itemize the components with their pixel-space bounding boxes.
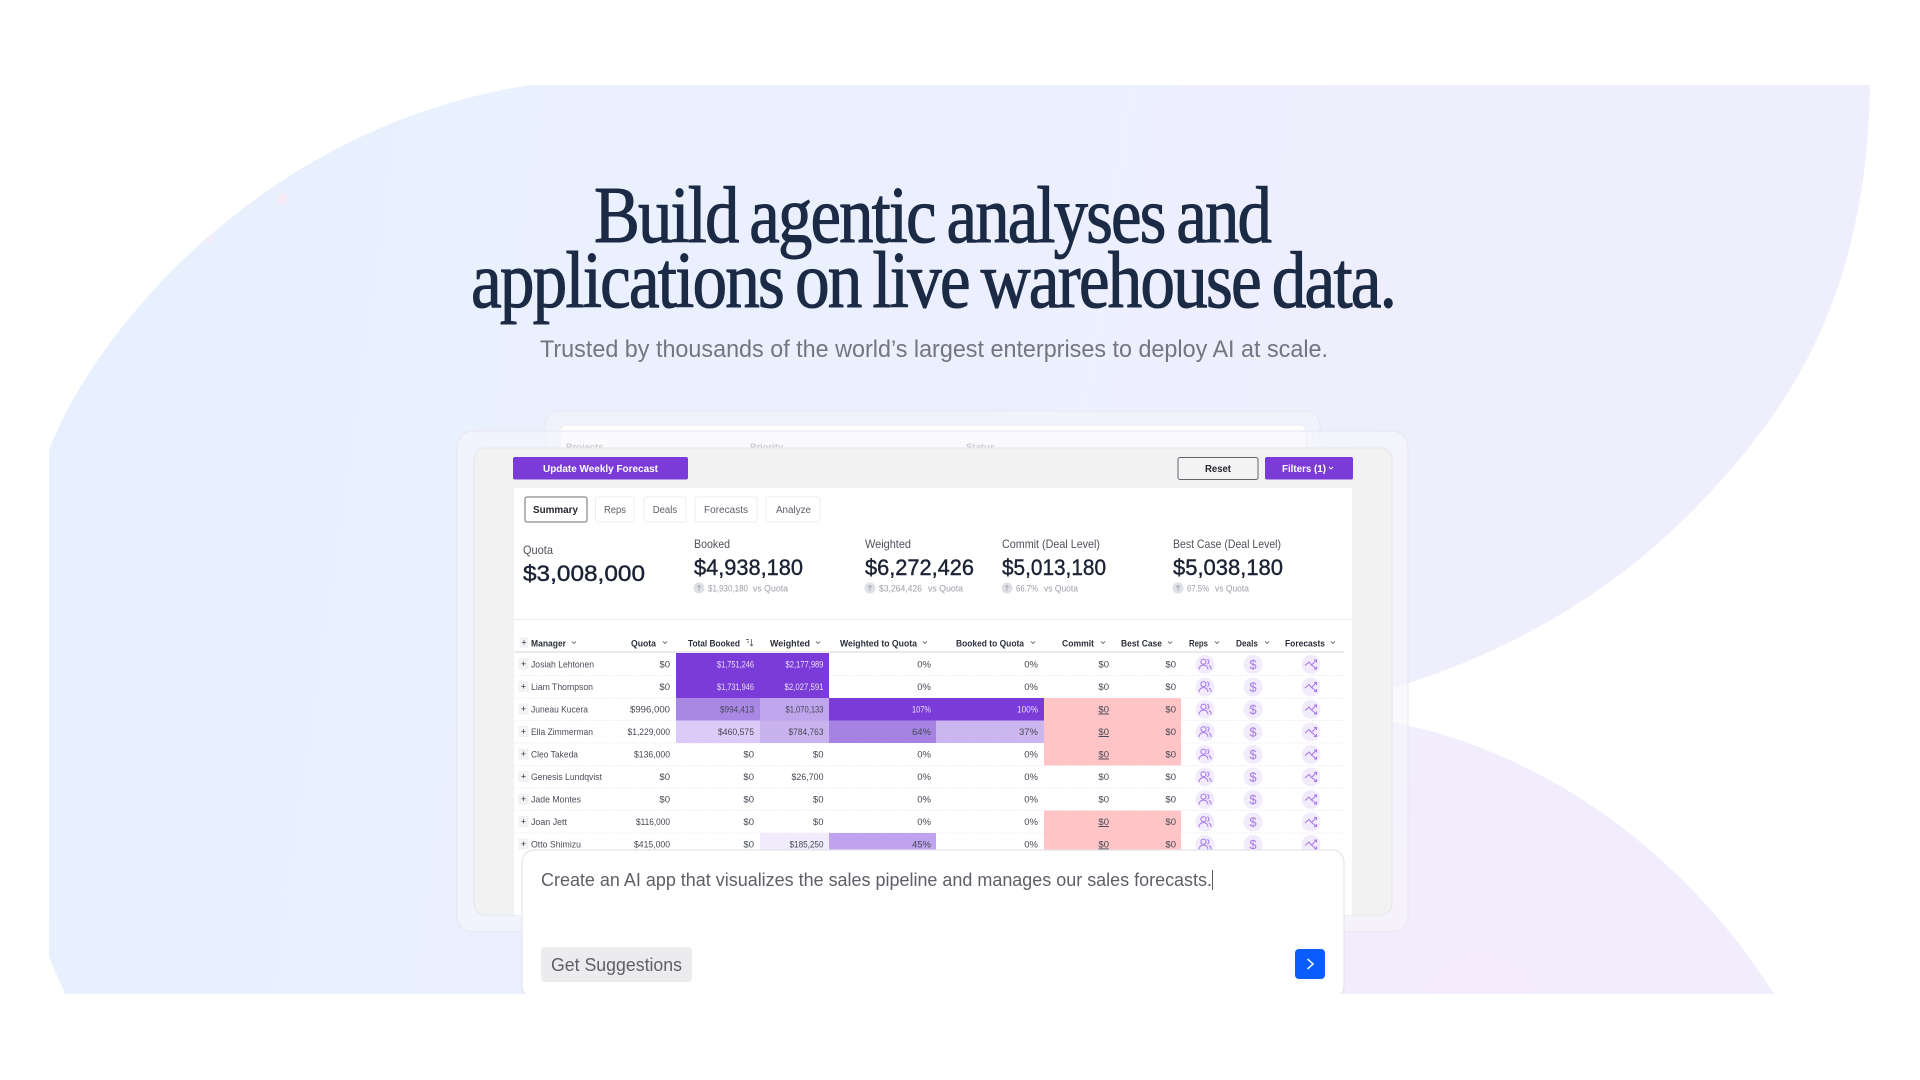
prompt text: Create an AI app that visualizes the sales pipeline and manages our sales forecasts. bbox=[541, 870, 1212, 890]
row: Ella Zimmerman: $784,763 bbox=[788, 727, 824, 738]
tabs bbox=[525, 497, 820, 522]
row: Ella Zimmerman bbox=[519, 722, 1320, 742]
row: Cleo Takeda: $0 bbox=[813, 750, 824, 760]
row: Joan Jett: $0 bbox=[813, 817, 824, 828]
row: Jade Montes bbox=[519, 790, 1320, 809]
tab: summary bbox=[525, 497, 587, 522]
row: Jade Montes: $0 bbox=[743, 794, 754, 806]
row: Juneau Kucera: $0 bbox=[1098, 704, 1109, 716]
button: reset bbox=[1178, 458, 1258, 480]
kpi: commit: $5,013,180 bbox=[1002, 555, 1106, 580]
tab: deals bbox=[644, 497, 686, 522]
kpi: best case: 67.5% bbox=[1187, 584, 1209, 594]
row: Otto Shimizu: 0% bbox=[1024, 840, 1039, 850]
outer front card bbox=[457, 431, 1408, 932]
kpi: weighted: vs Quota bbox=[928, 584, 963, 594]
row: Joan Jett: $0 bbox=[1165, 817, 1176, 828]
button: get suggestions: Get Suggestions bbox=[551, 955, 682, 975]
button: update weekly forecast: Update Weekly Forecast bbox=[543, 464, 659, 475]
kpi: commit: Commit (Deal Level) bbox=[1002, 537, 1100, 551]
row: Josiah Lehtonen: $0 bbox=[1165, 660, 1176, 670]
table header bbox=[514, 638, 1344, 652]
row: Juneau Kucera bbox=[519, 700, 1320, 719]
table header: Quota bbox=[631, 638, 657, 650]
row: Cleo Takeda: $136,000 bbox=[634, 750, 670, 760]
kpi: quota bbox=[523, 543, 645, 586]
row: Cleo Takeda: $ bbox=[1249, 747, 1257, 762]
kpi: quota: Quota bbox=[523, 543, 553, 557]
row: Juneau Kucera: 100% bbox=[1017, 704, 1038, 716]
button: update weekly forecast bbox=[513, 457, 688, 480]
row: Genesis Lundqvist: $ bbox=[1249, 770, 1257, 784]
row: Jade Montes: $0 bbox=[1165, 794, 1176, 806]
row: Genesis Lundqvist: $0 bbox=[659, 772, 670, 783]
row: Juneau Kucera: $0 bbox=[1165, 704, 1176, 716]
text caret bbox=[1212, 870, 1213, 890]
row: Genesis Lundqvist: $0 bbox=[743, 772, 754, 783]
table header: Booked to Quota bbox=[956, 638, 1025, 650]
kpi: commit: 66.7% bbox=[1016, 584, 1038, 594]
row: Cleo Takeda: $0 bbox=[1098, 750, 1109, 760]
row: Juneau Kucera: $996,000 bbox=[630, 704, 670, 716]
row: Genesis Lundqvist: + bbox=[521, 772, 526, 782]
table header: Reps bbox=[1189, 638, 1208, 650]
row: Josiah Lehtonen bbox=[519, 655, 1320, 674]
tab: analyze: Analyze bbox=[776, 505, 811, 516]
row: Cleo Takeda: 0% bbox=[1024, 750, 1039, 760]
row: Liam Thompson: + bbox=[521, 682, 526, 692]
kpi: weighted: Weighted bbox=[865, 537, 911, 551]
button: get suggestions bbox=[541, 947, 692, 982]
row: Jade Montes: 0% bbox=[917, 794, 932, 806]
headline: applications on live warehouse data. bbox=[471, 237, 1395, 325]
row: Genesis Lundqvist: $26,700 bbox=[792, 772, 824, 783]
row: Genesis Lundqvist: Genesis Lundqvist bbox=[531, 772, 602, 783]
back card: projects table: Projects bbox=[566, 442, 604, 453]
tab: forecasts bbox=[695, 497, 757, 522]
row: Joan Jett: + bbox=[521, 816, 526, 826]
row: Genesis Lundqvist: 0% bbox=[1024, 772, 1039, 783]
kpi: booked bbox=[694, 537, 803, 594]
row: Ella Zimmerman: Ella Zimmerman bbox=[531, 727, 593, 738]
table header: Weighted to Quota bbox=[840, 638, 918, 650]
row: Joan Jett: $ bbox=[1249, 814, 1257, 830]
table header: Commit bbox=[1062, 638, 1095, 650]
row: Jade Montes: $0 bbox=[1098, 794, 1109, 806]
table header: Best Case bbox=[1121, 638, 1162, 650]
row: Juneau Kucera: $1,070,133 bbox=[786, 704, 824, 716]
back card: projects table bbox=[544, 410, 1320, 448]
row: Joan Jett bbox=[519, 812, 1320, 832]
row: Ella Zimmerman: + bbox=[521, 726, 526, 736]
kpi: weighted: $6,272,426 bbox=[865, 555, 974, 580]
row: Ella Zimmerman: $460,575 bbox=[718, 727, 754, 738]
back card: projects table: Status bbox=[966, 442, 995, 453]
row: Cleo Takeda: Cleo Takeda bbox=[531, 750, 579, 760]
back card: projects table: Priority bbox=[750, 442, 784, 453]
row: Otto Shimizu: $0 bbox=[1098, 840, 1109, 850]
row: Josiah Lehtonen: 0% bbox=[1024, 660, 1039, 670]
row: Josiah Lehtonen: $1,751,246 bbox=[717, 660, 754, 670]
row: Jade Montes: Jade Montes bbox=[531, 794, 581, 806]
row: Ella Zimmerman: $ bbox=[1249, 724, 1257, 740]
heatmap cells bbox=[676, 653, 1181, 850]
row: Juneau Kucera: 107% bbox=[912, 704, 931, 716]
row: Josiah Lehtonen: $2,177,989 bbox=[786, 660, 824, 670]
sales forecast table bbox=[514, 638, 1344, 854]
row: Jade Montes: + bbox=[521, 794, 526, 804]
row: Otto Shimizu: Otto Shimizu bbox=[531, 840, 581, 850]
row: Josiah Lehtonen: + bbox=[521, 659, 526, 669]
kpi: booked: $1,930,180 bbox=[708, 584, 748, 594]
kpi: best case: $5,038,180 bbox=[1173, 555, 1283, 580]
tab: forecasts: Forecasts bbox=[704, 505, 748, 516]
tab: deals: Deals bbox=[653, 505, 677, 516]
row: Joan Jett: 0% bbox=[917, 817, 932, 828]
kpi: booked: $4,938,180 bbox=[694, 555, 803, 580]
row: Joan Jett: $0 bbox=[743, 817, 754, 828]
prompt box bbox=[522, 850, 1344, 994]
row: Ella Zimmerman: $0 bbox=[1098, 727, 1109, 738]
table header: + bbox=[521, 638, 527, 648]
subtitle: Trusted by thousands of the world’s largest enterprises to deploy AI at scale. bbox=[540, 336, 1328, 363]
row: Josiah Lehtonen: $0 bbox=[1098, 660, 1109, 670]
kpi: best case: Best Case (Deal Level) bbox=[1173, 537, 1281, 551]
row: Genesis Lundqvist: $0 bbox=[1098, 772, 1109, 783]
headline bbox=[471, 172, 1395, 325]
row: Juneau Kucera: Juneau Kucera bbox=[531, 704, 589, 716]
row: Josiah Lehtonen: $0 bbox=[659, 660, 670, 670]
row: Liam Thompson: $ bbox=[1249, 680, 1257, 694]
row: Jade Montes: $ bbox=[1249, 792, 1257, 807]
row: Cleo Takeda: $0 bbox=[743, 750, 754, 760]
row: Joan Jett: 0% bbox=[1024, 817, 1039, 828]
row: Liam Thompson: 0% bbox=[917, 682, 932, 693]
row: Liam Thompson: Liam Thompson bbox=[531, 682, 593, 693]
kpi: weighted bbox=[864, 537, 974, 594]
kpi: quota: $3,008,000 bbox=[523, 561, 645, 586]
row: Ella Zimmerman: 64% bbox=[912, 727, 932, 738]
table header: Manager bbox=[531, 638, 566, 650]
tab: analyze bbox=[766, 497, 820, 522]
white dashboard panel bbox=[514, 488, 1352, 915]
row: Liam Thompson: $0 bbox=[1098, 682, 1109, 693]
kpi: booked: vs Quota bbox=[753, 584, 788, 594]
row: Genesis Lundqvist: $0 bbox=[1165, 772, 1176, 783]
table header: Forecasts bbox=[1285, 638, 1325, 650]
row: Genesis Lundqvist bbox=[519, 768, 1320, 786]
row: Otto Shimizu bbox=[519, 835, 1320, 854]
row: Jade Montes: 0% bbox=[1024, 794, 1039, 806]
kpi: best case: vs Quota bbox=[1215, 584, 1249, 594]
row: Ella Zimmerman: $1,229,000 bbox=[628, 727, 670, 738]
row: Juneau Kucera: $ bbox=[1249, 702, 1257, 717]
row: Joan Jett: $116,000 bbox=[636, 817, 670, 828]
row: Joan Jett: Joan Jett bbox=[531, 817, 567, 828]
button: reset: Reset bbox=[1205, 464, 1232, 475]
row: Liam Thompson: 0% bbox=[1024, 682, 1039, 693]
row: Josiah Lehtonen: 0% bbox=[917, 660, 932, 670]
row: Cleo Takeda bbox=[519, 745, 1320, 764]
tab: reps bbox=[596, 497, 634, 522]
tab: summary: Summary bbox=[533, 505, 578, 516]
row: Cleo Takeda: $0 bbox=[1165, 750, 1176, 760]
kpi: booked: Booked bbox=[694, 537, 730, 551]
tab: reps: Reps bbox=[604, 505, 626, 516]
row: Otto Shimizu: $415,000 bbox=[634, 840, 670, 850]
row: Liam Thompson: $0 bbox=[1165, 682, 1176, 693]
row: Otto Shimizu: 45% bbox=[912, 840, 932, 850]
headline: Build agentic analyses and bbox=[594, 172, 1272, 260]
row: Ella Zimmerman: 37% bbox=[1019, 727, 1039, 738]
row: Ella Zimmerman: $0 bbox=[1165, 727, 1176, 738]
button: send arrow bbox=[1295, 949, 1325, 979]
button: filters bbox=[1265, 457, 1353, 480]
row: Liam Thompson: $0 bbox=[659, 682, 670, 693]
row: Otto Shimizu: $ bbox=[1249, 837, 1257, 852]
row: Jade Montes: $0 bbox=[813, 794, 824, 806]
kpi: best case bbox=[1172, 537, 1283, 594]
table header: Total Booked bbox=[688, 638, 740, 650]
row: Liam Thompson: $1,731,946 bbox=[717, 682, 754, 693]
kpi: commit: vs Quota bbox=[1044, 584, 1078, 594]
kpi: weighted: $3,264,426 bbox=[879, 584, 922, 594]
row: Josiah Lehtonen: $ bbox=[1249, 657, 1257, 672]
background shape bbox=[49, 85, 1870, 994]
table header: Weighted bbox=[770, 638, 810, 650]
row: Cleo Takeda: 0% bbox=[917, 750, 932, 760]
row: Cleo Takeda: + bbox=[521, 749, 526, 759]
row: Josiah Lehtonen: Josiah Lehtonen bbox=[531, 660, 594, 670]
row: Genesis Lundqvist: 0% bbox=[917, 772, 932, 783]
button: filters: Filters (1) bbox=[1282, 464, 1326, 475]
row: Liam Thompson bbox=[519, 678, 1320, 696]
row: Jade Montes: $0 bbox=[659, 794, 670, 806]
row: Joan Jett: $0 bbox=[1098, 817, 1109, 828]
row: Juneau Kucera: + bbox=[521, 704, 526, 714]
row: Juneau Kucera: $994,413 bbox=[720, 704, 754, 716]
kpi: commit bbox=[1002, 537, 1106, 594]
row: Otto Shimizu: $0 bbox=[743, 840, 754, 850]
row: Otto Shimizu: $0 bbox=[1165, 840, 1176, 850]
table header: Deals bbox=[1236, 638, 1258, 650]
row: Otto Shimizu: $185,250 bbox=[790, 840, 824, 850]
row: Liam Thompson: $2,027,591 bbox=[784, 682, 824, 693]
row: Otto Shimizu: + bbox=[521, 839, 526, 849]
inner grey app window bbox=[474, 448, 1392, 915]
